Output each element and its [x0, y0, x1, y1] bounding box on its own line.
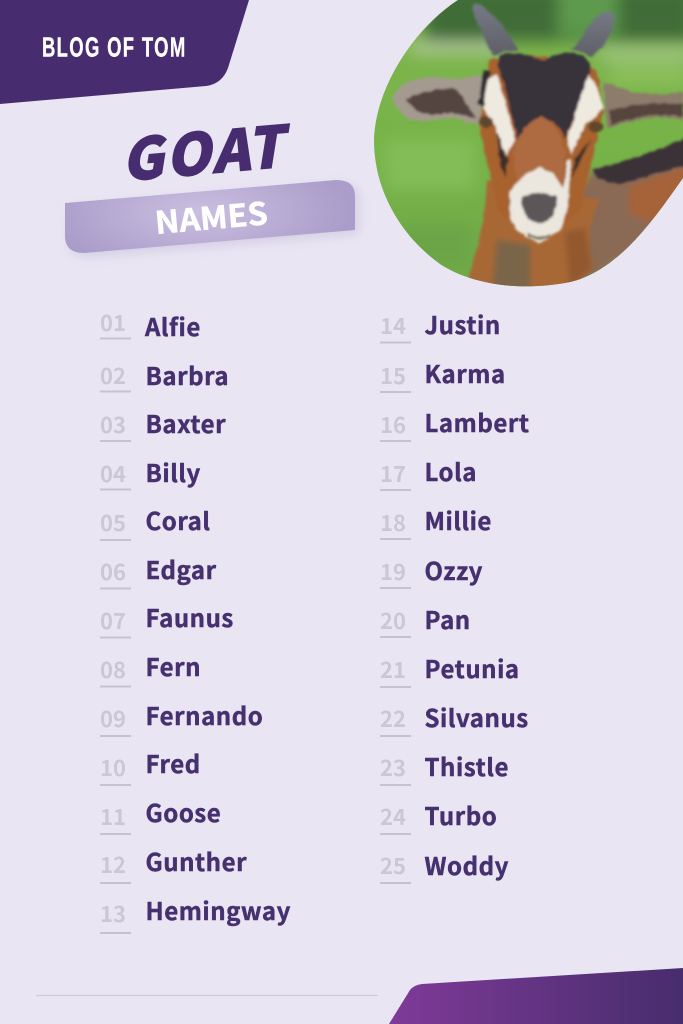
name 04	[100, 454, 201, 490]
name 15: Karma	[424, 355, 506, 390]
brand name: BLOG OF TOM	[42, 33, 185, 64]
name 01: 01	[100, 306, 126, 338]
name 12: 12	[100, 848, 126, 880]
name 07	[100, 599, 234, 638]
name 16: 16	[380, 408, 406, 440]
nose	[522, 193, 557, 223]
dark band by left ear	[478, 70, 490, 108]
name 05: Coral	[146, 502, 210, 537]
name 01: Alfie	[144, 308, 201, 343]
name 04: Billy	[146, 454, 201, 489]
name 19: 19	[380, 555, 406, 587]
name 04: 04	[100, 457, 126, 489]
name 13: Hemingway	[146, 892, 291, 927]
name 16	[380, 404, 530, 441]
name 05: 05	[100, 506, 126, 538]
name 22: 22	[380, 702, 406, 734]
name 17: 17	[380, 457, 406, 489]
name 14: 14	[380, 309, 406, 341]
name 19	[380, 552, 483, 588]
name 17: Lola	[424, 453, 477, 488]
name 23	[380, 748, 509, 785]
name 25: 25	[380, 849, 406, 881]
name 16: Lambert	[424, 404, 530, 439]
name 06	[100, 551, 217, 588]
names list: left column	[100, 306, 291, 933]
name 21	[380, 650, 520, 687]
name 12: Gunther	[146, 843, 247, 878]
goat body	[556, 165, 683, 284]
subtitle band: names	[65, 180, 359, 257]
brown blaze	[514, 117, 565, 187]
name 02	[100, 357, 229, 392]
name 09: 09	[100, 702, 126, 734]
name 24: 24	[380, 800, 406, 832]
name 07: 07	[100, 604, 126, 636]
name 09	[100, 697, 263, 736]
name 21: 21	[380, 653, 406, 685]
eyes	[479, 116, 493, 128]
forehead dark patch	[497, 53, 590, 140]
name 10	[100, 745, 201, 785]
name 03: 03	[100, 408, 126, 440]
name 25	[380, 847, 509, 883]
name 24	[380, 797, 497, 834]
name 07: Faunus	[146, 599, 234, 634]
name 05	[100, 502, 210, 540]
name 03: Baxter	[146, 405, 226, 440]
name 08	[100, 648, 201, 686]
name 23: Thistle	[424, 748, 509, 783]
name 01	[100, 306, 201, 343]
name 20: Pan	[424, 601, 471, 636]
name 15: 15	[380, 359, 406, 391]
white stripes	[484, 75, 515, 157]
name 23: 23	[380, 751, 406, 783]
name 13: 13	[100, 897, 126, 929]
name 14	[380, 306, 501, 342]
left ear	[392, 76, 482, 126]
name 22	[380, 699, 529, 736]
name 02: Barbra	[146, 357, 229, 392]
muzzle	[510, 158, 571, 243]
name 03	[100, 405, 226, 441]
name 12	[100, 843, 247, 883]
name 02: 02	[100, 359, 126, 391]
horns	[472, 3, 518, 56]
name 15	[380, 355, 506, 392]
name 11: Goose	[146, 794, 221, 829]
name 24: Turbo	[424, 797, 497, 832]
name 18	[380, 502, 492, 539]
dark back	[592, 136, 683, 184]
goat head	[479, 56, 604, 225]
name 06: Edgar	[146, 551, 217, 586]
name 17	[380, 453, 477, 490]
name 20	[380, 601, 471, 637]
name 11: 11	[100, 800, 126, 832]
goat neck	[467, 180, 600, 290]
right ear	[603, 82, 683, 128]
name 18: 18	[380, 506, 406, 538]
name 06: 06	[100, 555, 126, 587]
name 10: Fred	[146, 745, 201, 780]
neck shading	[492, 240, 530, 292]
name 18: Millie	[424, 502, 492, 537]
title: goat: GOAT	[117, 101, 295, 198]
goat photo blob	[370, 0, 683, 295]
subtitle text: NAMES	[153, 188, 269, 243]
footer banner	[389, 968, 683, 1024]
names list: right column	[380, 306, 530, 883]
name 08: 08	[100, 653, 126, 685]
header banner	[0, 0, 249, 104]
name 11	[100, 794, 221, 834]
name 08: Fern	[146, 648, 201, 683]
name 22: Silvanus	[424, 699, 529, 734]
name 09: Fernando	[146, 697, 263, 732]
name 25: Woddy	[424, 847, 509, 882]
name 19: Ozzy	[424, 552, 483, 587]
name 21: Petunia	[424, 650, 520, 685]
name 20: 20	[380, 604, 406, 636]
name 14: Justin	[424, 306, 501, 341]
name 13	[100, 892, 291, 933]
name 10: 10	[100, 751, 126, 783]
